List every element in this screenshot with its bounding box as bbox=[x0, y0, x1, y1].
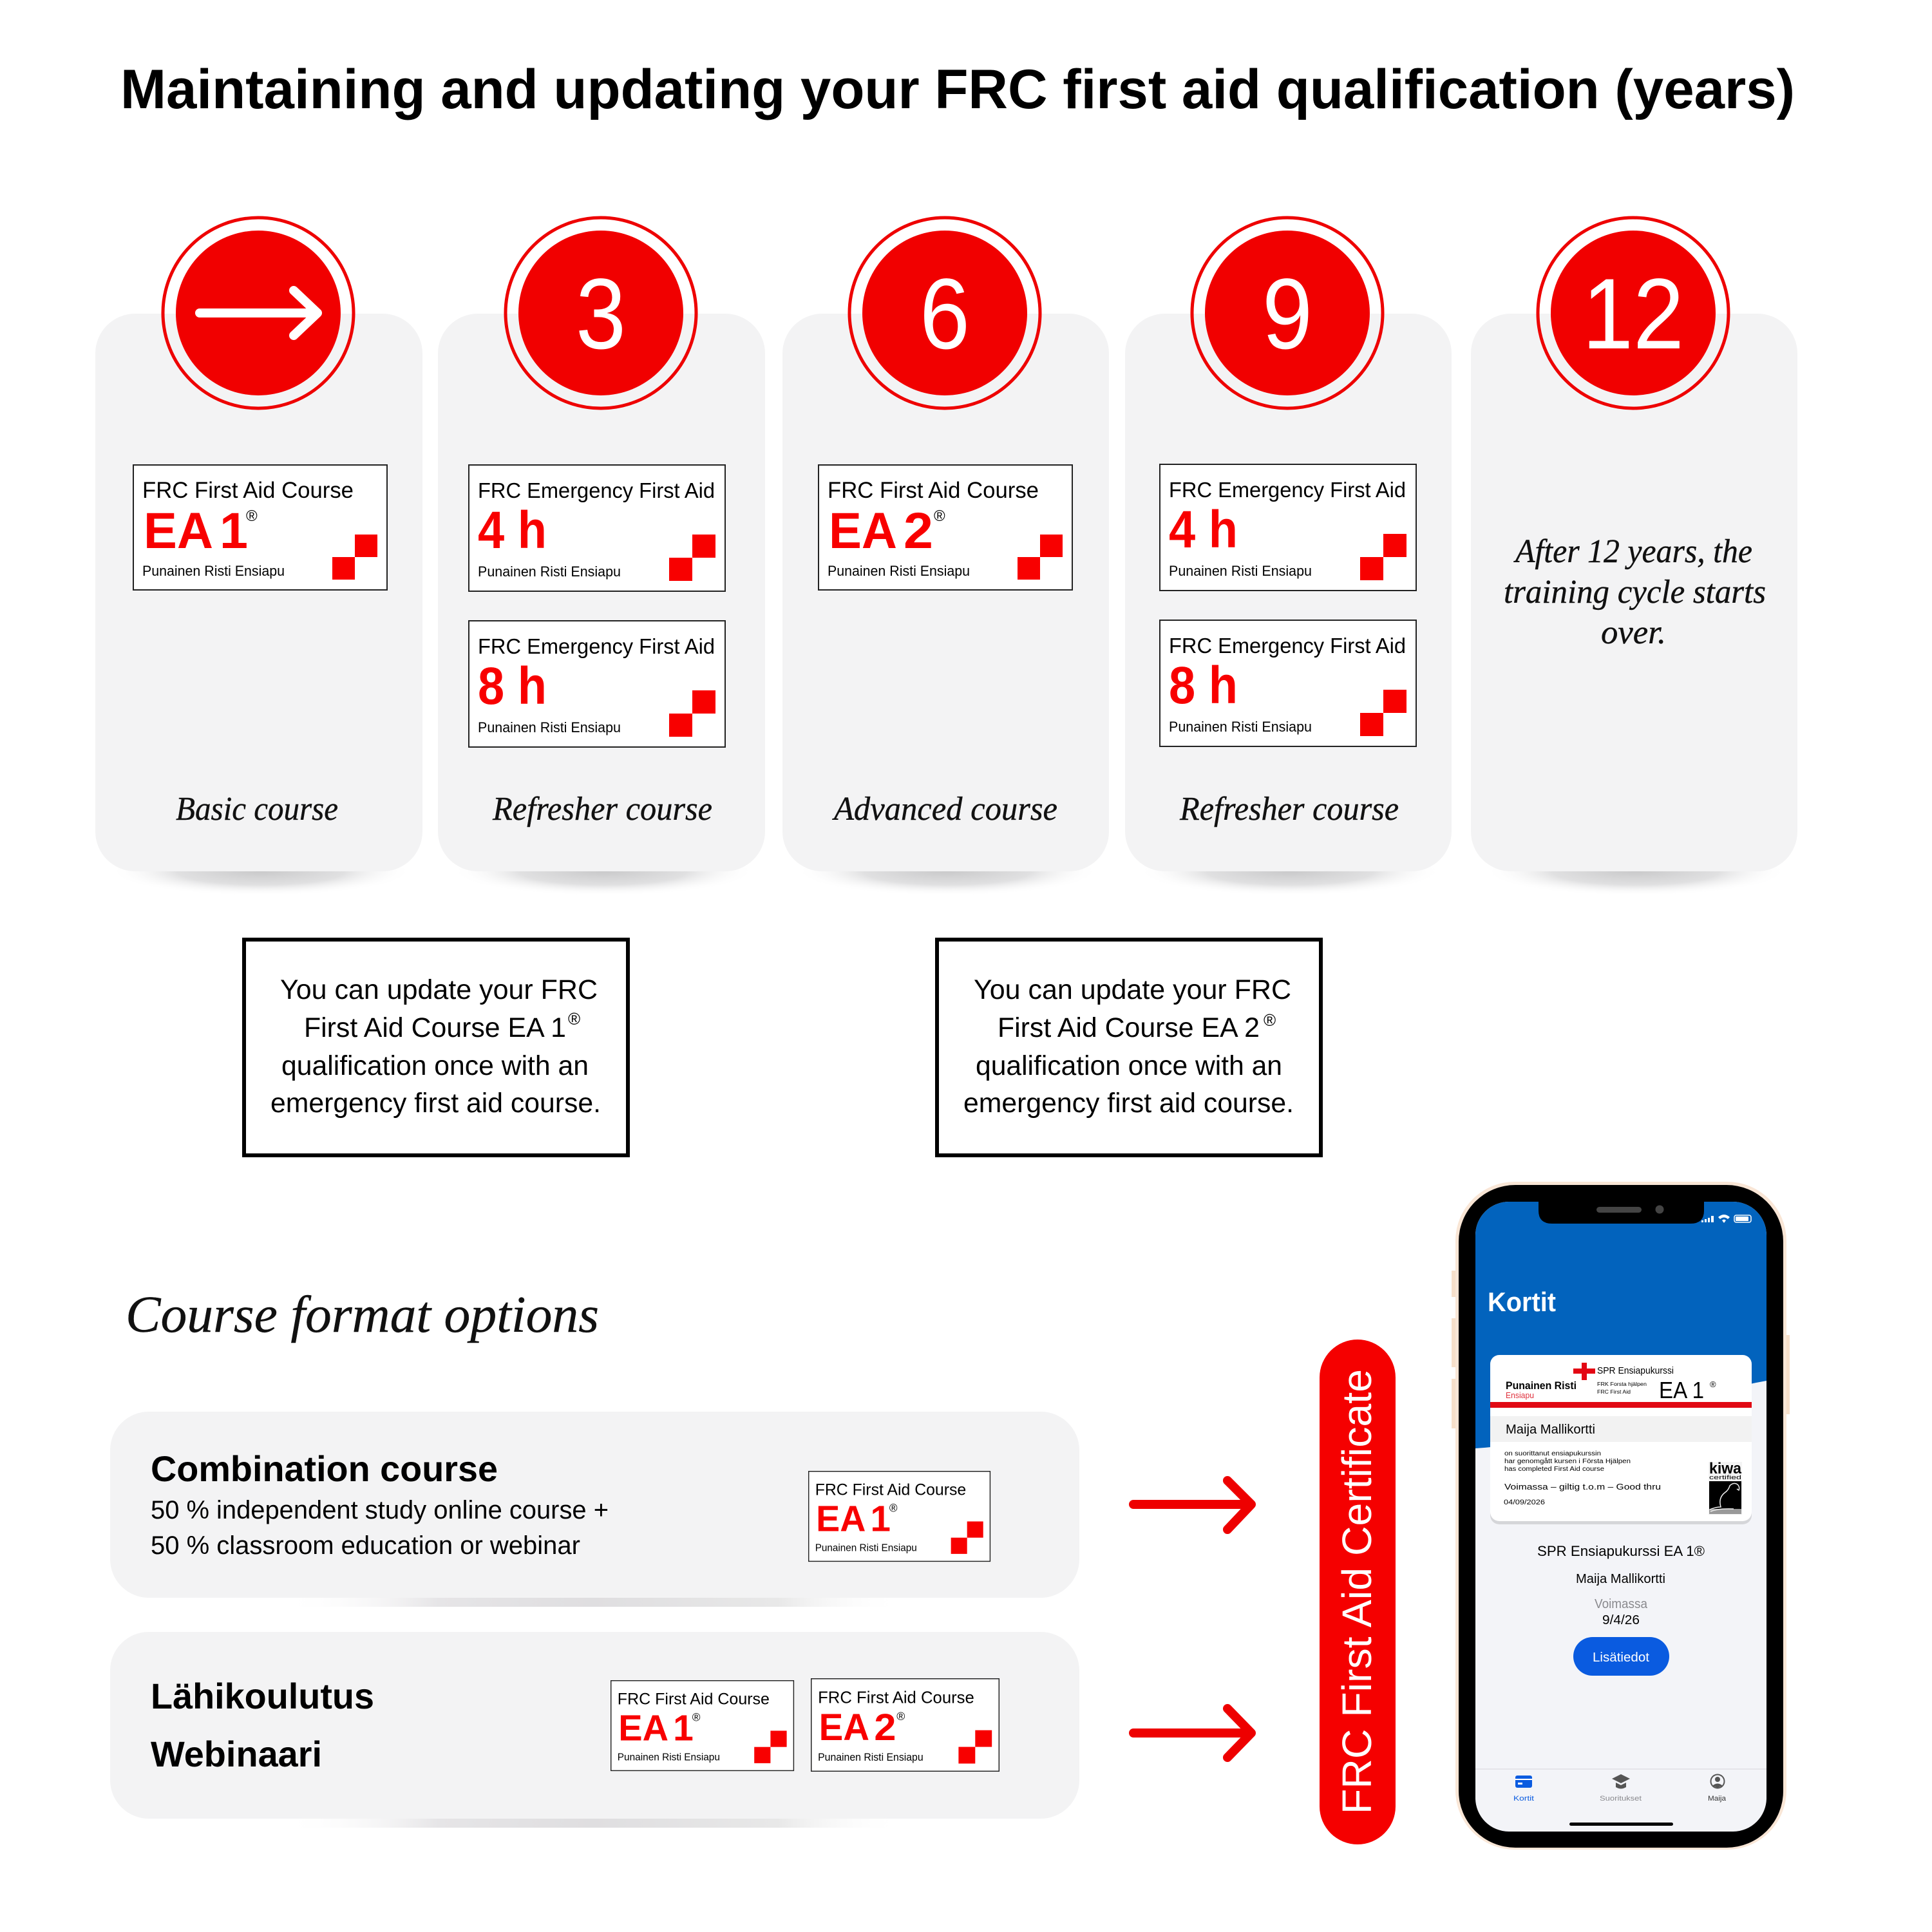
pill: FRC First Aid Certificate: FRC First Aid Certificate bbox=[1334, 1369, 1380, 1814]
app heading: Kortit bbox=[1488, 1287, 1556, 1317]
badge: FRC First Aid Course EA 2: EA bbox=[829, 502, 897, 559]
badge: EA 1: EA bbox=[618, 1709, 668, 1749]
arrow: combination course to certificate bbox=[1133, 1481, 1251, 1530]
heading: classroom: Lähikoulutus bbox=[151, 1676, 374, 1716]
tab: Kortit bbox=[1513, 1776, 1534, 1803]
title: Maintaining and updating your FRC first aid qualification (years) bbox=[120, 59, 1795, 120]
callout: update EA 1: emergency first aid course. bbox=[270, 1088, 601, 1119]
callout: update EA 1 bbox=[244, 940, 628, 1155]
badge: emergency first aid 8 h: Punainen Risti Ensiapu bbox=[1169, 719, 1312, 735]
text: after 12 years the cycle starts over: over. bbox=[1601, 614, 1666, 651]
caption: basic course: Basic course bbox=[176, 791, 338, 828]
heading: combination course: Combination course bbox=[151, 1448, 498, 1489]
badge: EA 1 bbox=[809, 1472, 990, 1561]
icon: kiwa certified: certified bbox=[1709, 1474, 1741, 1481]
badge: EA 1: EA bbox=[816, 1499, 866, 1540]
callout: update EA 1: ® bbox=[568, 1009, 580, 1028]
icon: number 6 circle bbox=[849, 218, 1040, 408]
text: format description bbox=[151, 1496, 609, 1560]
digital card: Voimassa – giltig t.o.m – Good thru bbox=[1504, 1482, 1661, 1492]
callout: update EA 2: qualification once with an bbox=[976, 1050, 1282, 1081]
badge: emergency first aid 8 h: FRC Emergency First Aid bbox=[478, 634, 715, 658]
digital card: Ensiapu bbox=[1506, 1390, 1534, 1400]
digital card: ® bbox=[1710, 1379, 1716, 1389]
badge: EA 1: ® bbox=[692, 1710, 701, 1723]
badge: EA 1: FRC First Aid Course bbox=[815, 1481, 966, 1499]
badge: emergency first aid 8 h bbox=[469, 621, 725, 747]
badge: EA 2: FRC First Aid Course bbox=[818, 1689, 974, 1707]
badge: EA 2 bbox=[811, 1679, 999, 1771]
tab: Suoritukset bbox=[1600, 1774, 1642, 1803]
badge: FRC First Aid Course EA 1: Punainen Risti Ensiapu bbox=[142, 563, 285, 579]
course details: Voimassa bbox=[1595, 1597, 1648, 1611]
badge: emergency first aid 4 h bbox=[469, 465, 725, 591]
badge: EA 1: 1 bbox=[673, 1709, 694, 1749]
status icons bbox=[1701, 1215, 1751, 1223]
badge: FRC First Aid Course EA 1 bbox=[133, 465, 387, 590]
callout: update EA 2 bbox=[937, 940, 1321, 1155]
badge: emergency first aid 4 h: FRC Emergency First Aid bbox=[478, 478, 715, 502]
notch bbox=[1539, 1198, 1704, 1224]
digital card: FRC First Aid bbox=[1597, 1389, 1631, 1395]
callout: update EA 2: emergency first aid course. bbox=[963, 1088, 1294, 1119]
icon: number 12 circle: 12 bbox=[1582, 258, 1684, 370]
icon: number 3 circle: 3 bbox=[576, 258, 626, 370]
badge: emergency first aid 4 h: Punainen Risti Ensiapu bbox=[1169, 563, 1312, 579]
heading: course format options: Course format options bbox=[126, 1287, 599, 1343]
badge: EA 1: Punainen Risti Ensiapu bbox=[618, 1752, 720, 1763]
digital card: Maija Mallikortti bbox=[1506, 1423, 1595, 1437]
tab: Kortit: Kortit bbox=[1513, 1795, 1534, 1803]
badge: EA 2: EA bbox=[819, 1707, 869, 1748]
arrow: classroom to certificate bbox=[1133, 1709, 1251, 1757]
tab: Maija: Maija bbox=[1708, 1795, 1727, 1803]
callout: update EA 1: First Aid Course EA 1 bbox=[304, 1012, 566, 1043]
digital card: has completed First Aid course bbox=[1504, 1466, 1604, 1473]
panel: advanced course column bbox=[782, 218, 1109, 896]
badge: emergency first aid 4 h bbox=[1160, 464, 1416, 591]
badge: EA 1: Punainen Risti Ensiapu bbox=[815, 1543, 917, 1554]
heading: webinar: Webinaari bbox=[151, 1734, 322, 1774]
badge: FRC First Aid Course EA 1: EA bbox=[144, 502, 213, 559]
pill: FRC First Aid Certificate bbox=[1320, 1340, 1396, 1844]
badge: EA 1 bbox=[611, 1681, 793, 1770]
text: after 12 years the cycle starts over bbox=[1504, 533, 1766, 651]
badge: EA 1: 1 bbox=[871, 1499, 891, 1540]
icon: number 6 circle: 6 bbox=[920, 258, 970, 370]
caption: refresher course: Refresher course bbox=[492, 791, 712, 828]
badge: emergency first aid 8 h: 8 h bbox=[1169, 656, 1238, 715]
digital card: har genomgått kursen i Första Hjälpen bbox=[1504, 1457, 1631, 1465]
badge: emergency first aid 8 h: FRC Emergency First Aid bbox=[1169, 634, 1406, 658]
button: Lisätiedot bbox=[1573, 1637, 1669, 1676]
panel: second refresher column bbox=[1125, 218, 1452, 896]
phone screen bbox=[1475, 1198, 1766, 1832]
panel: cycle restart column bbox=[1471, 218, 1797, 896]
callout: update EA 2: You can update your FRC bbox=[974, 974, 1291, 1005]
badge: FRC First Aid Course EA 1: 1 bbox=[220, 502, 248, 559]
course details bbox=[1537, 1543, 1705, 1627]
tab: Maija bbox=[1708, 1775, 1727, 1803]
callout: update EA 1: You can update your FRC bbox=[280, 974, 598, 1005]
badge: FRC First Aid Course EA 2: ® bbox=[934, 507, 945, 525]
panel: combination course bbox=[110, 1412, 1079, 1607]
caption: advanced course: Advanced course bbox=[832, 791, 1057, 828]
badge: FRC First Aid Course EA 2 bbox=[819, 465, 1072, 590]
digital card bbox=[1490, 1355, 1752, 1524]
caption: refresher course: Refresher course bbox=[1179, 791, 1399, 828]
phone mockup bbox=[1452, 1182, 1790, 1850]
badge: FRC First Aid Course EA 1: ® bbox=[246, 507, 258, 525]
callout: update EA 2: ® bbox=[1264, 1010, 1276, 1030]
digital card: FRK Forsta hjälpen bbox=[1597, 1381, 1647, 1387]
digital card: EA 1 bbox=[1659, 1377, 1704, 1403]
panel: classroom and webinar bbox=[110, 1632, 1079, 1828]
icon: number 9 circle bbox=[1192, 218, 1383, 408]
button: Lisätiedot: Lisätiedot bbox=[1593, 1651, 1649, 1665]
digital card: 04/09/2026 bbox=[1504, 1499, 1545, 1506]
text: format description: 50 % classroom education or webinar bbox=[151, 1531, 580, 1560]
badge: FRC First Aid Course EA 2: Punainen Risti Ensiapu bbox=[828, 563, 970, 579]
panel: basic course column bbox=[95, 218, 422, 896]
badge: EA 1: FRC First Aid Course bbox=[618, 1690, 770, 1708]
icon: number 3 circle bbox=[506, 218, 696, 408]
callout: update EA 1: qualification once with an bbox=[281, 1050, 589, 1081]
badge: emergency first aid 4 h: FRC Emergency First Aid bbox=[1169, 478, 1406, 502]
badge: emergency first aid 4 h: 4 h bbox=[1169, 500, 1238, 559]
icon: kiwa certified: kiwa bbox=[1709, 1460, 1742, 1477]
icon: number 9 circle: 9 bbox=[1262, 258, 1312, 370]
digital card: SPR Ensiapukurssi bbox=[1597, 1365, 1674, 1376]
badge: FRC First Aid Course EA 2: 2 bbox=[904, 502, 933, 559]
badge: emergency first aid 4 h: Punainen Risti Ensiapu bbox=[478, 564, 621, 580]
digital card: on suorittanut ensiapukurssin bbox=[1504, 1450, 1601, 1457]
callout: update EA 2: First Aid Course EA 2 bbox=[998, 1012, 1260, 1043]
text: after 12 years the cycle starts over: training cycle starts bbox=[1504, 574, 1766, 611]
icon: kiwa certified bbox=[1709, 1460, 1742, 1515]
phone side buttons bbox=[1452, 1271, 1790, 1428]
badge: emergency first aid 8 h: 8 h bbox=[478, 657, 547, 715]
digital card: Punainen Risti bbox=[1506, 1379, 1577, 1392]
tab: Suoritukset: Suoritukset bbox=[1600, 1795, 1642, 1803]
text: format description: 50 % independent study online course + bbox=[151, 1496, 609, 1524]
course details: SPR Ensiapukurssi EA 1® bbox=[1537, 1543, 1705, 1559]
badge: FRC First Aid Course EA 1: FRC First Aid Course bbox=[142, 478, 354, 503]
badge: FRC First Aid Course EA 2: FRC First Aid Course bbox=[828, 478, 1039, 503]
badge: EA 2: Punainen Risti Ensiapu bbox=[818, 1752, 923, 1763]
panel: first refresher column bbox=[438, 218, 765, 896]
badge: emergency first aid 8 h: Punainen Risti Ensiapu bbox=[478, 719, 621, 735]
badge: EA 2: 2 bbox=[874, 1707, 896, 1748]
course details: 9/4/26 bbox=[1602, 1613, 1640, 1627]
badge: emergency first aid 4 h: 4 h bbox=[478, 501, 547, 560]
icon: arrow in red circle bbox=[163, 218, 354, 408]
text: after 12 years the cycle starts over: After 12 years, the bbox=[1513, 533, 1752, 570]
course details: Maija Mallikortti bbox=[1576, 1572, 1665, 1586]
badge: EA 1: ® bbox=[889, 1501, 898, 1514]
badge: emergency first aid 8 h bbox=[1160, 620, 1416, 746]
icon: red cross bbox=[1573, 1363, 1595, 1380]
icon: number 12 circle bbox=[1538, 218, 1728, 408]
badge: EA 2: ® bbox=[896, 1710, 905, 1723]
home indicator bbox=[1569, 1823, 1673, 1826]
